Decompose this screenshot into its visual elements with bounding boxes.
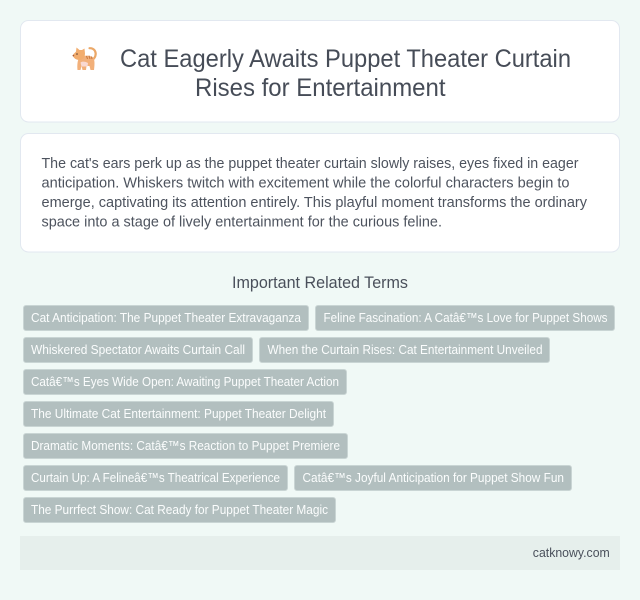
- icon: cat: [73, 48, 96, 70]
- heading: important related terms: Important Related Terms: [232, 274, 408, 292]
- tag 5: [24, 370, 346, 394]
- panel: related term tags: [24, 306, 614, 522]
- tag 3: [24, 338, 252, 362]
- tag 1: [24, 306, 308, 330]
- tag 6: [24, 402, 334, 426]
- tag 2: [316, 306, 614, 330]
- tag 9: [294, 466, 572, 490]
- tag 5: Catâ€™s Eyes Wide Open: Awaiting Puppet Theater Action: [31, 374, 339, 389]
- description paragraph: The cat's ears perk up as the puppet theater curtain slowly raises, eyes fixed in eager: [42, 156, 579, 172]
- tag 7: [24, 434, 348, 458]
- description paragraph: [42, 156, 588, 230]
- tag 8: Curtain Up: A Felineâ€™s Theatrical Experience: [31, 470, 280, 485]
- tag 10: The Purrfect Show: Cat Ready for Puppet Theater Magic: [31, 502, 328, 517]
- panel: title header: [20, 20, 620, 122]
- panel: description: [20, 134, 620, 252]
- footer: [20, 536, 620, 570]
- tag 8: [24, 466, 288, 490]
- tag 9: Catâ€™s Joyful Anticipation for Puppet Show Fun: [302, 470, 564, 485]
- tag 6: The Ultimate Cat Entertainment: Puppet Theater Delight: [31, 406, 326, 421]
- tag 1: Cat Anticipation: The Puppet Theater Extravaganza: [31, 310, 302, 325]
- title text: Cat Eagerly Awaits Puppet Theater Curtain: [120, 45, 571, 73]
- description paragraph: space into a stage of lively entertainment for the curious feline.: [42, 214, 442, 230]
- tag 4: [260, 338, 550, 362]
- description paragraph: emerge, captivating its attention entirely. This playful moment transforms the ordinary: [42, 195, 588, 211]
- title text: Rises for Entertainment: [195, 74, 446, 102]
- tag 7: Dramatic Moments: Catâ€™s Reaction to Puppet Premiere: [31, 438, 340, 453]
- title text: [120, 45, 571, 102]
- tag 10: [24, 498, 336, 522]
- footer source text: catknowy.com: [533, 545, 610, 560]
- tag 3: Whiskered Spectator Awaits Curtain Call: [31, 342, 245, 357]
- tag 4: When the Curtain Rises: Cat Entertainment Unveiled: [268, 342, 542, 357]
- tag 2: Feline Fascination: A Catâ€™s Love for Puppet Shows: [324, 310, 608, 325]
- description paragraph: anticipation. Whiskers twitch with excitement while the colorful characters begin to: [42, 176, 570, 192]
